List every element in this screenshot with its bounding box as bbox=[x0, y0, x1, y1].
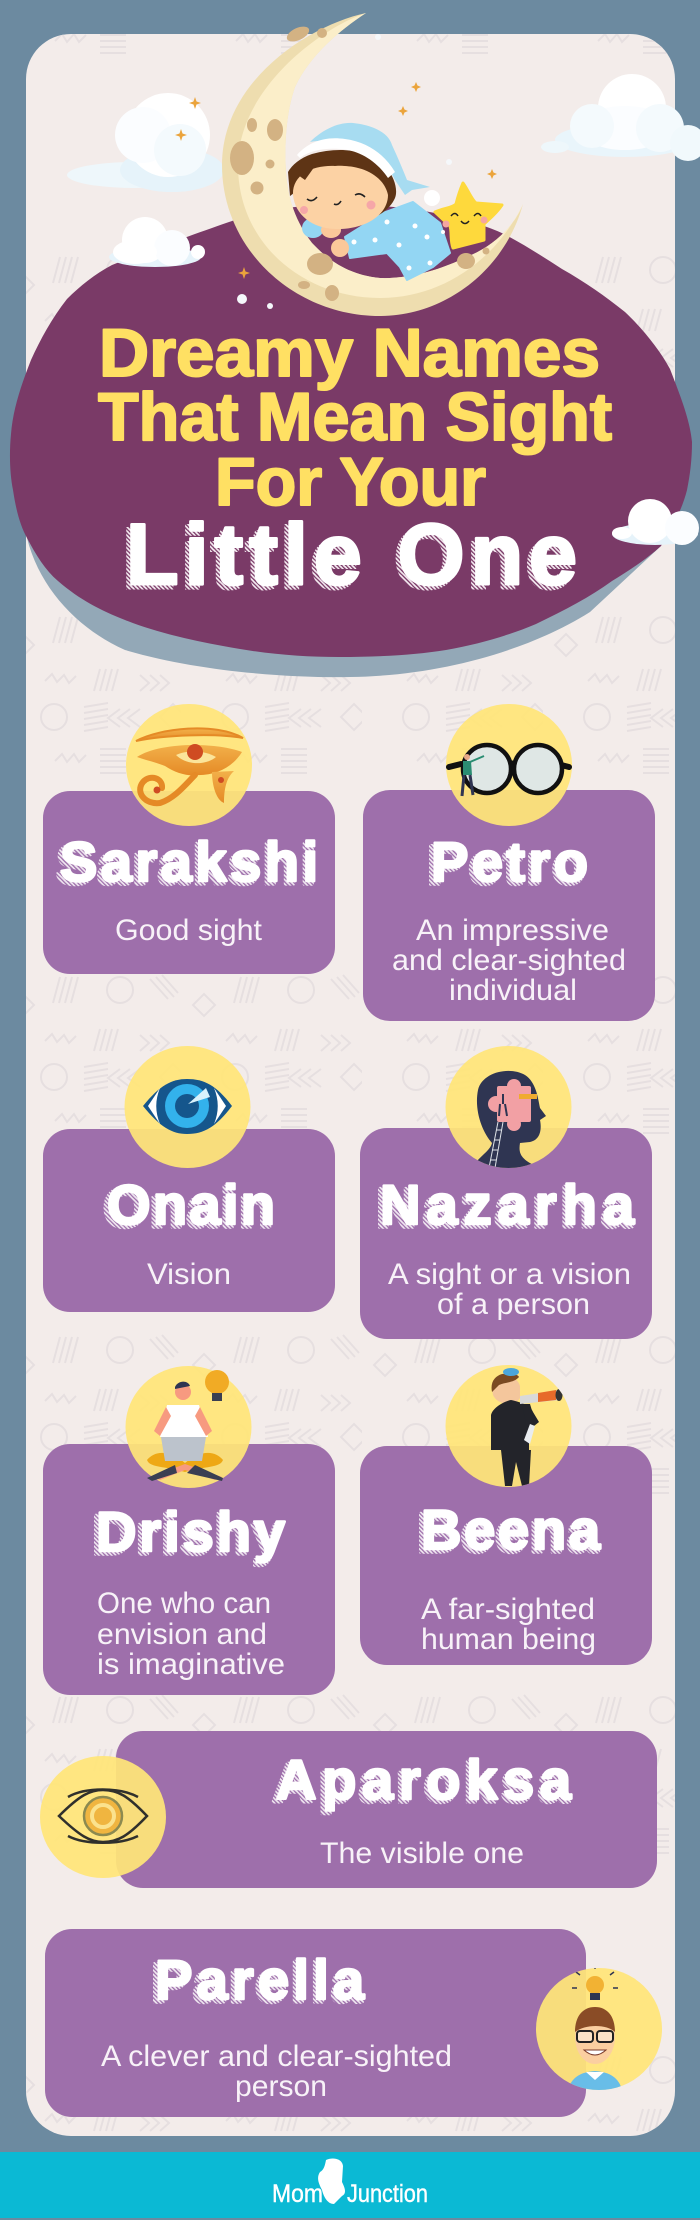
meaning bbox=[97, 1587, 285, 1681]
meaning bbox=[388, 1258, 631, 1321]
name: Onain: Onain bbox=[107, 1173, 275, 1236]
header blob bbox=[10, 204, 692, 657]
icon: man with laptop and bulb bbox=[147, 1370, 229, 1481]
icon: blue eye bbox=[143, 1079, 232, 1134]
title: For Your bbox=[215, 444, 486, 520]
title bbox=[98, 315, 612, 607]
meaning: and clear-sighted bbox=[392, 944, 626, 977]
card: Sarakshi bbox=[43, 704, 335, 974]
icon: outlined eye bbox=[59, 1790, 147, 1843]
icon: round glasses bbox=[449, 745, 569, 796]
name: Nazarha: Nazarha bbox=[380, 1173, 635, 1236]
name: Petro: Petro bbox=[431, 830, 588, 893]
name: Nazarha: Nazarha bbox=[376, 1176, 633, 1239]
name: Aparoksa: Aparoksa bbox=[272, 1751, 570, 1814]
icon: head with puzzle piece bbox=[473, 1071, 546, 1168]
dots bbox=[237, 34, 452, 309]
cloud: large left bbox=[67, 93, 224, 192]
name: Onain: Onain bbox=[103, 1176, 273, 1239]
meaning: The visible one bbox=[320, 1837, 524, 1870]
name: Drishy: Drishy bbox=[96, 1500, 285, 1563]
meaning: An impressive bbox=[416, 914, 609, 947]
footer band bbox=[0, 2152, 700, 2218]
logo icon: mother and child bbox=[318, 2158, 345, 2204]
meaning: of a person bbox=[437, 1288, 590, 1321]
name: Parella: Parella bbox=[155, 1948, 365, 2011]
meaning bbox=[421, 1593, 596, 1656]
meaning: human being bbox=[421, 1623, 596, 1656]
name: Petro: Petro bbox=[427, 833, 586, 896]
baby body in pyjamas bbox=[302, 202, 450, 280]
name: Beena: Beena bbox=[421, 1498, 601, 1561]
meaning: A far-sighted bbox=[421, 1593, 595, 1626]
star with smile bbox=[435, 183, 502, 248]
icon: boy with idea bulb bbox=[568, 1964, 622, 2090]
illustration: crescent moon with sleeping baby bbox=[67, 13, 700, 316]
meaning: One who can bbox=[97, 1587, 271, 1620]
card: Nazarha bbox=[360, 1046, 652, 1339]
name: Drishy: Drishy bbox=[92, 1503, 283, 1566]
cloud: top right bbox=[541, 74, 700, 161]
title: That Mean Sight bbox=[98, 379, 612, 455]
meaning: envision and bbox=[97, 1618, 267, 1651]
card: Parella bbox=[45, 1929, 662, 2117]
name: Aparoksa: Aparoksa bbox=[276, 1748, 572, 1811]
cloud: bottom right of header bbox=[612, 499, 699, 545]
card: Beena bbox=[360, 1365, 652, 1665]
card: Petro bbox=[363, 704, 655, 1021]
meaning: individual bbox=[449, 974, 577, 1007]
logo: MomJunction bbox=[272, 2158, 428, 2208]
header blob shadow bbox=[27, 500, 661, 677]
icon: eye of Horus bbox=[136, 728, 243, 803]
title: Little One bbox=[126, 507, 577, 603]
meaning bbox=[392, 914, 626, 1007]
icon: businessman with telescope bbox=[491, 1368, 562, 1486]
card: Drishy bbox=[43, 1366, 335, 1695]
title: Little One bbox=[122, 511, 573, 607]
logo: MomJunction: Mom bbox=[272, 2180, 323, 2208]
title: Dreamy Names bbox=[99, 315, 600, 391]
cloud: small left bbox=[109, 217, 205, 267]
moon bbox=[222, 13, 523, 316]
name: Sarakshi: Sarakshi bbox=[56, 833, 316, 896]
card: Onain bbox=[43, 1046, 335, 1312]
name: Sarakshi: Sarakshi bbox=[60, 830, 318, 893]
name: Parella: Parella bbox=[151, 1951, 363, 2014]
meaning: A sight or a vision bbox=[388, 1258, 631, 1291]
meaning: Vision bbox=[147, 1258, 231, 1291]
name: Beena: Beena bbox=[417, 1501, 599, 1564]
baby head with hair and nightcap bbox=[288, 123, 440, 229]
meaning: A clever and clear-sighted bbox=[101, 2040, 452, 2073]
card: Aparoksa bbox=[40, 1731, 657, 1888]
logo: MomJunction: Junction bbox=[347, 2180, 428, 2208]
meaning: is imaginative bbox=[97, 1648, 285, 1681]
sparkles bbox=[175, 82, 497, 279]
meaning: Good sight bbox=[115, 914, 263, 947]
meaning: person bbox=[235, 2070, 327, 2103]
meaning bbox=[101, 2040, 452, 2103]
